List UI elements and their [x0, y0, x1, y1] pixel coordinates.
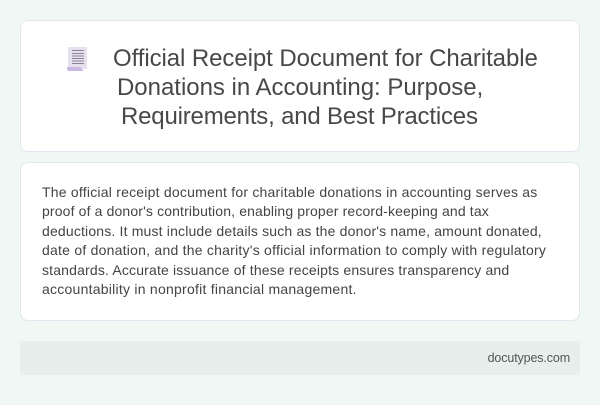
footer source text: docutypes.com: [488, 351, 570, 365]
paragraph line 5: standards. Accurate issuance of these receipts ensures transparency and: [42, 262, 509, 278]
title line 3: Requirements, and Best Practices: [121, 103, 478, 130]
panel: description card: [20, 162, 580, 321]
paragraph line 2: proof of a donor's contribution, enabling proper record-keeping and tax: [42, 203, 489, 219]
icon: receipt document: [67, 47, 87, 71]
title line 1: Official Receipt Document for Charitable: [113, 45, 538, 72]
panel: title card: [20, 20, 580, 152]
title line 2: Donations in Accounting: Purpose,: [117, 74, 483, 101]
paragraph line 1: The official receipt document for charitable donations in accounting serves as: [42, 184, 538, 200]
paragraph line 3: deductions. It must include details such as the donor's name, amount donated,: [42, 223, 542, 239]
footer bar: [20, 341, 580, 375]
paragraph line 6: accountability in nonprofit financial management.: [42, 281, 357, 297]
paragraph line 4: date of donation, and the charity's official information to comply with regulatory: [42, 242, 546, 258]
